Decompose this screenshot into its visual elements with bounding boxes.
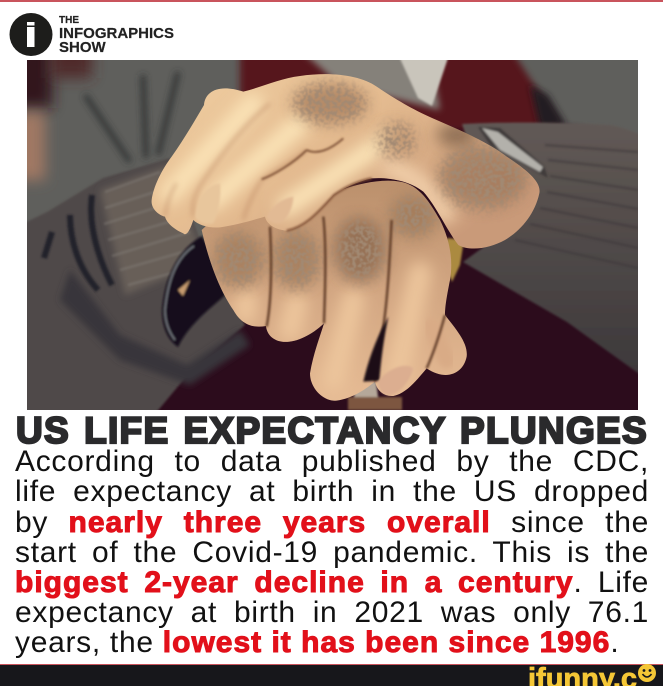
photo: elderly hands resting on a cane xyxy=(27,60,638,410)
right sleeve xyxy=(462,123,645,378)
heading: US LIFE EXPECTANCY PLUNGES xyxy=(16,410,648,451)
top edge line xyxy=(0,0,663,2)
left sleeve xyxy=(20,158,250,420)
body paragraph: start of the Covid-19 pandemic. This is the xyxy=(15,536,649,569)
upper hand xyxy=(152,74,540,249)
body paragraph: years, the lowest it has been since 1996. xyxy=(15,626,619,659)
lower hand xyxy=(202,181,467,401)
body paragraph: According to data published by the CDC, xyxy=(15,445,649,478)
logo wordmark: SHOW xyxy=(59,39,106,56)
body paragraph xyxy=(15,445,649,659)
cane handle xyxy=(162,236,402,410)
logo wordmark xyxy=(59,15,174,56)
bottom watermark bar xyxy=(0,664,663,686)
logo wordmark: INFOGRAPHICS xyxy=(59,25,174,42)
ifunny.co watermark xyxy=(528,663,656,686)
body paragraph: life expectancy at birth in the US dropped xyxy=(15,475,649,508)
icon: smiley xyxy=(638,664,656,682)
body paragraph: biggest 2-year decline in a century. Life xyxy=(15,566,649,599)
watch and ring details xyxy=(445,127,548,282)
body paragraph: expectancy at birth in 2021 was only 76.1 xyxy=(15,596,649,629)
icon: info circle xyxy=(10,13,52,56)
logo wordmark: THE xyxy=(59,15,79,26)
logo: The Infographics Show xyxy=(10,13,174,56)
blurred background clothing xyxy=(10,40,660,250)
body paragraph: by nearly three years overall since the xyxy=(15,506,649,539)
